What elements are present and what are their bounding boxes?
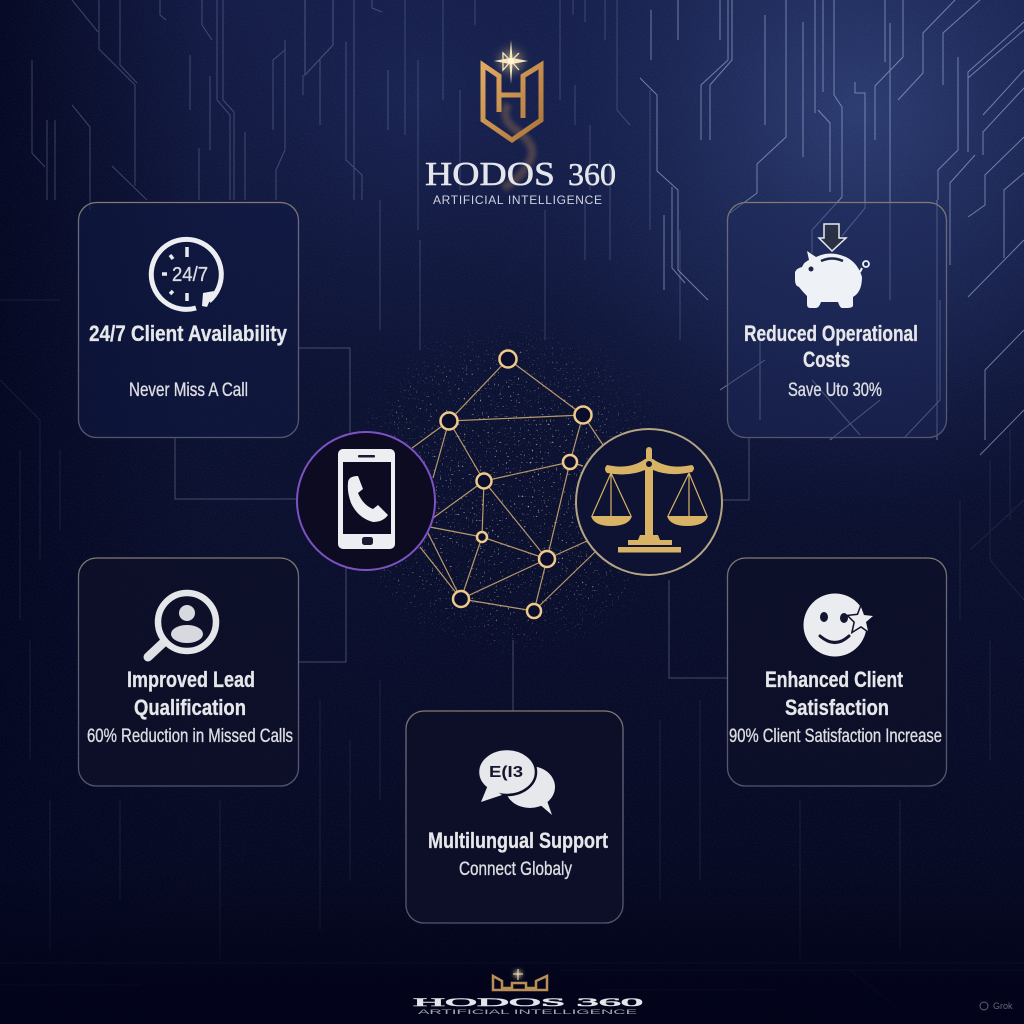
brand tagline: ARTIFICIAL INTELLIGENCE: [433, 193, 602, 207]
bottom fade: [0, 870, 1024, 1024]
circuit lines: upper centre: [380, 0, 680, 350]
panel: reduced operational costs: Costs: [803, 347, 850, 372]
panel: enhanced client satisfaction: Satisfaction: [785, 695, 889, 720]
gold dust: [352, 320, 666, 660]
icon: smiley with star: [804, 594, 873, 656]
logo: 360: [568, 156, 616, 192]
circuit lines: upper left: [32, 0, 388, 210]
network graph: [352, 320, 666, 660]
logo swirl: [503, 105, 532, 188]
panel: reduced operational costs: [728, 202, 946, 438]
icon: speech bubbles: [478, 749, 555, 815]
icon: 24/7 clock: [151, 239, 221, 309]
footer brand name: HODOS 360: [413, 997, 644, 1009]
subtext: 60% Reduction in Missed Calls: [87, 726, 293, 747]
heading: Enhanced Client: [765, 667, 904, 692]
watermark: [980, 1001, 1013, 1011]
panel: 24/7 client availability: [78, 202, 298, 438]
icon: speech bubbles: E(I3: [489, 764, 523, 781]
icon: magnifier with person: [148, 593, 216, 657]
watermark: Grok: [993, 1001, 1013, 1011]
subtext: Save Uto 30%: [788, 380, 882, 401]
subtext: 90% Client Satisfaction Increase: [729, 726, 942, 747]
subtext: Connect Globaly: [459, 859, 572, 880]
network nodes: [440, 350, 592, 618]
network edges: [412, 359, 603, 611]
subtext: Never Miss A Call: [129, 380, 248, 401]
panel: improved lead qualification: [78, 558, 298, 786]
icon: 24/7 clock: 24/7: [172, 264, 208, 286]
icon: scales of justice circle: [576, 429, 722, 575]
circuit lines: upper right: [640, 0, 1024, 455]
heading: 24/7 Client Availability: [89, 321, 288, 346]
panel: enhanced client satisfaction: [728, 558, 946, 786]
footer logo: [413, 969, 644, 1016]
heading: Reduced Operational: [744, 321, 918, 346]
icon: piggy bank: [795, 224, 869, 308]
heading: Improved Lead: [127, 667, 255, 692]
icon: phone circle: [297, 432, 435, 570]
panel: multilingual support: [406, 711, 623, 923]
logo: [425, 40, 616, 207]
circuit lines: middle and lower: [0, 300, 1024, 1024]
panel: improved lead qualification: Qualification: [134, 695, 246, 720]
logo star: [494, 40, 528, 84]
heading: Multilungual Support: [428, 828, 609, 853]
brand name: HODOS: [425, 156, 555, 193]
connector lines: [175, 348, 749, 711]
footer tagline: ARTIFICIAL INTELLIGENCE: [418, 1010, 637, 1016]
logo shield: [483, 65, 541, 140]
